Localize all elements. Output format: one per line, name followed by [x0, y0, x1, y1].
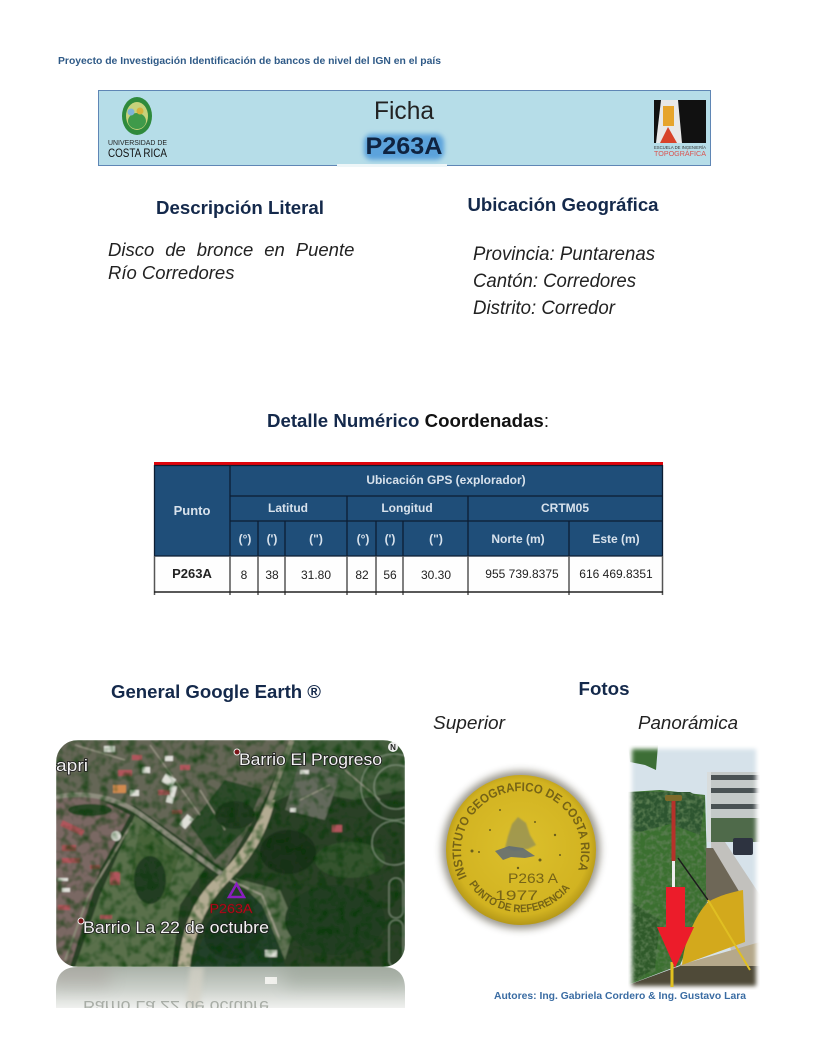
photo: bronze disc: INSTITUTO GEOGRAFICO DE COSTA RICA [452, 782, 590, 880]
table data row: P263A [172, 566, 212, 581]
map labels: Barrio El Progreso [239, 750, 382, 769]
heading: General Google Earth: General Google Earth ® [111, 682, 321, 702]
coordinates table [154, 462, 663, 595]
text block: description [108, 239, 354, 283]
logo: Topografía: TOPOGRÁFICA [654, 149, 706, 158]
table data row: 38 [265, 568, 279, 582]
logo: Universidad de Costa Rica: COSTA RICA [108, 146, 167, 160]
text block: description: Disco de bronce en Puente [108, 239, 354, 260]
table header text: (') [267, 532, 277, 546]
title text: Ficha [374, 97, 434, 125]
text block: location: Cantón: Corredores [473, 271, 636, 292]
table header text: CRTM05 [541, 501, 589, 515]
table header text: (°) [357, 532, 369, 546]
text block: description: Río Corredores [108, 262, 234, 283]
heading: Descripción Literal: Descripción Literal [156, 198, 324, 218]
table header text [174, 473, 640, 546]
satellite map [56, 740, 427, 967]
authors credit: Autores: Ing. Gabriela Cordero & Ing. Gustavo Lara [494, 990, 746, 1002]
table header text: (") [309, 532, 323, 546]
header line: Proyecto de Investigación Identificación de bancos de nivel del IGN en el país [58, 55, 441, 67]
caption: Panorámica: Panorámica [638, 712, 738, 733]
station code: P263A [366, 133, 442, 160]
table data row: 8 [241, 568, 248, 582]
table data row: 616 469.8351 [579, 567, 653, 581]
logo: Topografía: ESCUELA DE INGENIERÍA [654, 144, 706, 150]
logo: Universidad de Costa Rica [108, 97, 167, 160]
north badge [388, 742, 398, 752]
photo: bronze disc: 1977 [495, 887, 538, 903]
photo: bronze disc: PUNTO DE REFERENCIA [469, 880, 570, 912]
glow [364, 134, 444, 160]
table header text: Latitud [268, 501, 308, 515]
table data row: 30.30 [421, 568, 451, 582]
table header text: Punto [174, 503, 210, 518]
north badge: N [390, 743, 396, 752]
heading: Ubicación Geográfica: Ubicación Geográfica [468, 195, 660, 215]
table header text: (') [385, 532, 395, 546]
photo: bronze disc [436, 766, 606, 934]
photo: panoramic [628, 745, 760, 990]
surveying pole [665, 795, 750, 987]
table header text: (°) [239, 532, 251, 546]
map labels [56, 750, 382, 937]
text block: location: Distrito: Corredor [473, 298, 616, 319]
photo: bronze disc: P263 A [508, 870, 559, 886]
logo: Topografía [654, 100, 706, 158]
table data row: 31.80 [301, 568, 331, 582]
map marker [210, 884, 253, 916]
heading: Fotos: Fotos [578, 679, 630, 699]
table header text: Longitud [381, 501, 433, 515]
map reflection [56, 967, 405, 1008]
table data row: 56 [383, 568, 397, 582]
map marker: P263A [210, 901, 253, 916]
red arrow [657, 887, 694, 968]
table data row: 955 739.8375 [485, 567, 559, 581]
map labels: Barrio La 22 de octubre [83, 918, 269, 937]
heading: Detalle Numérico Coordenadas: Detalle Numérico Coordenadas: [267, 410, 549, 431]
table header text: Este (m) [592, 532, 640, 546]
table header text: (") [429, 532, 443, 546]
table data row: 82 [355, 568, 369, 582]
text block: location [473, 244, 655, 319]
map reflection: Barrio La 22 de octubre [83, 997, 269, 1016]
map labels: apri [56, 756, 88, 775]
table header text: Norte (m) [491, 532, 545, 546]
caption: Superior: Superior [433, 712, 506, 733]
text block: location: Provincia: Puntarenas [473, 244, 655, 265]
table data row [172, 566, 653, 582]
title banner [98, 90, 710, 167]
logo: Universidad de Costa Rica: UNIVERSIDAD DE [108, 140, 167, 147]
table header text: Ubicación GPS (explorador) [366, 473, 526, 487]
